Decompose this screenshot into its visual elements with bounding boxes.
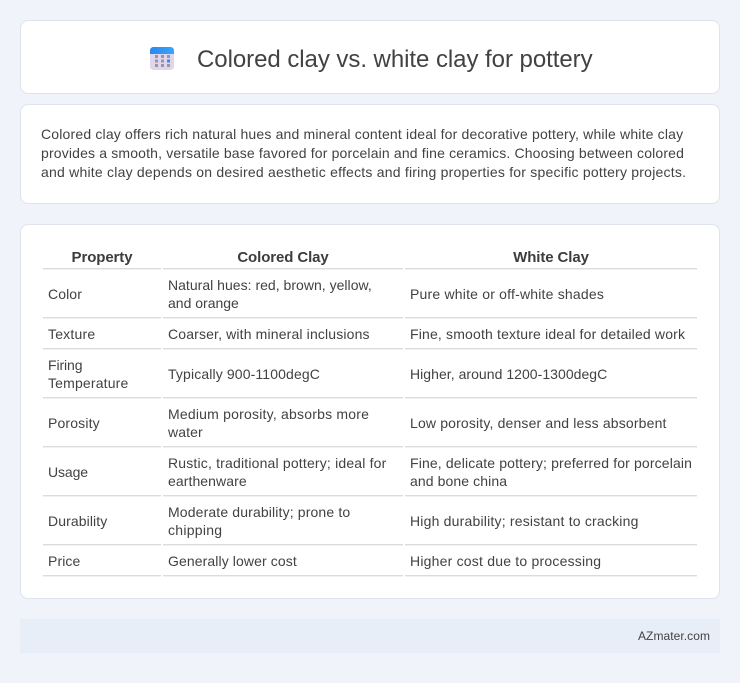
comparison table: Natural hues: red, brown, yellow, bbox=[168, 277, 372, 293]
comparison table: Rustic, traditional pottery; ideal for bbox=[168, 455, 386, 471]
comparison table: Color bbox=[48, 286, 82, 302]
comparison table: and bone china bbox=[410, 473, 507, 489]
comparison table: High durability; resistant to cracking bbox=[410, 513, 639, 529]
comparison table: Usage bbox=[48, 464, 88, 480]
comparison table: Texture bbox=[48, 326, 95, 342]
comparison table: Colored Clay bbox=[237, 249, 329, 266]
comparison table: Price bbox=[48, 553, 80, 569]
table panel bbox=[20, 224, 720, 599]
comparison table: earthenware bbox=[168, 473, 247, 489]
comparison table: and orange bbox=[168, 295, 239, 311]
comparison table: White Clay bbox=[513, 249, 589, 266]
comparison table: Moderate durability; prone to bbox=[168, 504, 350, 520]
comparison table: Temperature bbox=[48, 375, 128, 391]
comparison table: Porosity bbox=[48, 415, 100, 431]
intro panel bbox=[20, 104, 720, 204]
intro text: provides a smooth, versatile base favored for porcelain and fine ceramics. Choosing between colored bbox=[41, 145, 684, 161]
intro text: and white clay depends on desired aesthetic effects and firing properties for specific pottery projects. bbox=[41, 164, 686, 180]
comparison table: Property bbox=[72, 249, 132, 266]
comparison table: Durability bbox=[48, 513, 107, 529]
comparison table: Low porosity, denser and less absorbent bbox=[410, 415, 667, 431]
intro text: Colored clay offers rich natural hues and mineral content ideal for decorative pottery, while white clay bbox=[41, 126, 683, 142]
footer bar bbox=[20, 619, 720, 653]
comparison table: Higher cost due to processing bbox=[410, 553, 601, 569]
comparison table: Firing bbox=[48, 357, 82, 373]
comparison table: Generally lower cost bbox=[168, 553, 297, 569]
intro text bbox=[41, 126, 686, 180]
comparison table: water bbox=[168, 424, 203, 440]
comparison table: Higher, around 1200-1300degC bbox=[410, 366, 607, 382]
comparison table: chipping bbox=[168, 522, 222, 538]
comparison table: Coarser, with mineral inclusions bbox=[168, 326, 370, 342]
footer text: AZmater.com bbox=[638, 629, 710, 643]
comparison table: Pure white or off-white shades bbox=[410, 286, 604, 302]
comparison table: Fine, delicate pottery; preferred for porcelain bbox=[410, 455, 692, 471]
title: Colored clay vs. white clay for pottery bbox=[197, 46, 593, 73]
header panel bbox=[20, 20, 720, 94]
comparison table: Typically 900-1100degC bbox=[168, 366, 320, 382]
comparison table: Medium porosity, absorbs more bbox=[168, 406, 369, 422]
comparison table: Fine, smooth texture ideal for detailed work bbox=[410, 326, 685, 342]
icon: calendar bbox=[150, 47, 174, 70]
